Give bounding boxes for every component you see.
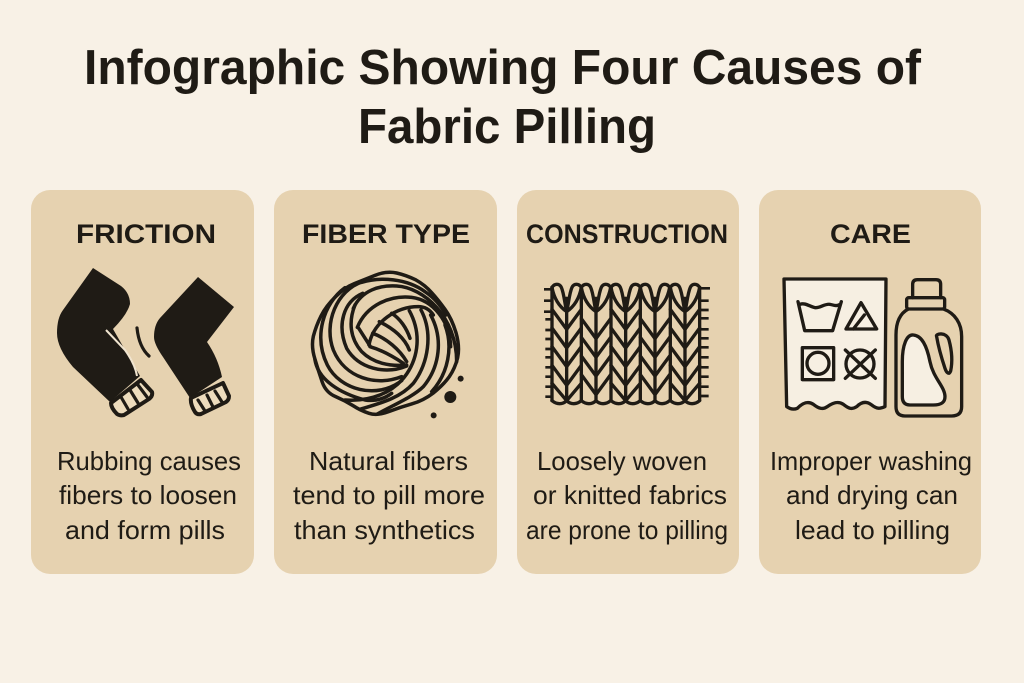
- body text: construction: or knitted fabrics: [533, 480, 727, 510]
- body text: fiber type: Natural fibers: [309, 446, 468, 476]
- title: Infographic Showing Four Causes of: [84, 41, 922, 95]
- body text: fiber type: tend to pill more: [293, 480, 485, 510]
- heading: care: CARE: [830, 219, 911, 249]
- panel: construction: [517, 190, 739, 574]
- icon: knit fabric swatch: [544, 284, 710, 404]
- body text: fiber type: than synthetics: [294, 515, 475, 545]
- body text: care: and drying can: [786, 480, 958, 510]
- icon: rubbing sleeves: [57, 268, 234, 415]
- heading: construction: CONSTRUCTION: [526, 219, 728, 249]
- body text: construction: [526, 446, 728, 545]
- body text: care: [770, 446, 972, 545]
- body text: friction: [57, 446, 241, 545]
- body text: friction: Rubbing causes: [57, 446, 241, 476]
- body text: care: lead to pilling: [795, 515, 950, 545]
- panel: friction: [31, 190, 254, 574]
- heading: friction: FRICTION: [76, 219, 216, 249]
- body text: construction: are prone to pilling: [526, 515, 728, 545]
- panel: fiber type: [274, 190, 497, 574]
- body text: care: Improper washing: [770, 446, 972, 476]
- body text: friction: and form pills: [65, 515, 225, 545]
- title: Fabric Pilling: [358, 100, 656, 154]
- icon: care label and detergent bottle: [784, 279, 962, 416]
- body text: fiber type: [293, 446, 485, 545]
- icon: yarn ball: [312, 272, 464, 418]
- body text: construction: Loosely woven: [537, 446, 707, 476]
- title: [84, 41, 922, 154]
- heading: fiber type: FIBER TYPE: [302, 219, 470, 249]
- body text: friction: fibers to loosen: [59, 480, 237, 510]
- panel: care: [759, 190, 981, 574]
